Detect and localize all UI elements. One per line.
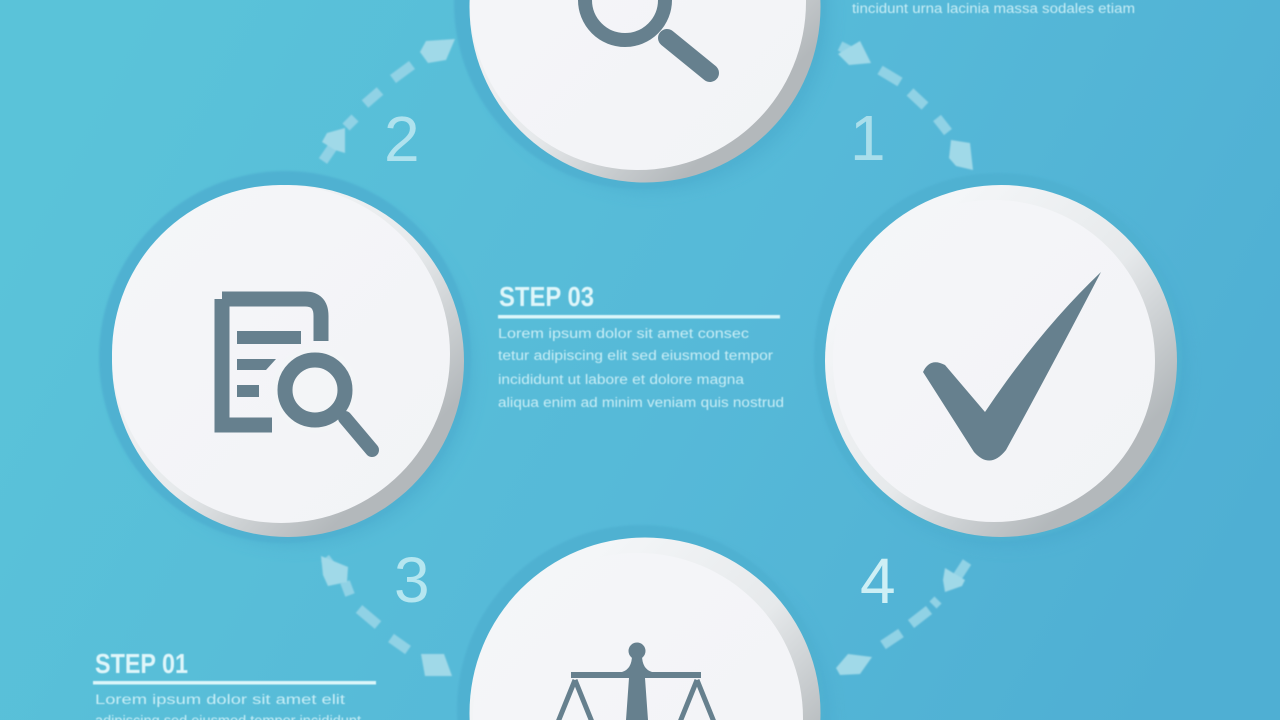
number 2: 2 — [384, 103, 420, 175]
text block: step 03 — [498, 281, 784, 410]
circle node: left — [99, 171, 471, 544]
rule: step 01 — [93, 681, 376, 684]
body: step 03: tetur adipiscing elit sed eiusmod tempor — [498, 348, 774, 363]
body: step 01: Lorem ipsum dolor sit amet elit — [95, 692, 345, 707]
circle node: right — [814, 173, 1184, 544]
icon: check mark — [923, 272, 1101, 461]
arrow: step 1 dashed connector — [838, 41, 973, 170]
icon: document search — [222, 299, 372, 450]
heading: step 03: STEP 03 — [499, 281, 594, 312]
number 1: 1 — [850, 102, 886, 174]
circle node: top — [454, 0, 828, 190]
body: step 03: incididunt ut labore et dolore magna — [498, 372, 745, 387]
text block: top description fragment: tincidunt urna lacinia massa sodales etiam — [852, 1, 1135, 16]
rule: step 03 — [498, 315, 780, 318]
icon: balance scale — [558, 642, 714, 720]
body: step 03: Lorem ipsum dolor sit amet consec — [498, 326, 749, 341]
number 3: 3 — [394, 544, 430, 616]
number 4: 4 — [860, 545, 896, 617]
circle node: bottom — [457, 525, 828, 720]
text block: step 01 — [93, 648, 376, 720]
arrow: step 2 dashed connector — [322, 39, 455, 161]
body: step 03: aliqua enim ad minim veniam quis nostrud — [498, 395, 784, 410]
body: step 03 — [498, 326, 784, 410]
heading: step 01: STEP 01 — [95, 648, 188, 679]
icon: magnifier — [585, 0, 710, 73]
body: step 01 — [95, 692, 361, 720]
arrow: step 3 dashed connector — [321, 556, 452, 676]
arrow: step 4 dashed connector — [836, 562, 967, 675]
